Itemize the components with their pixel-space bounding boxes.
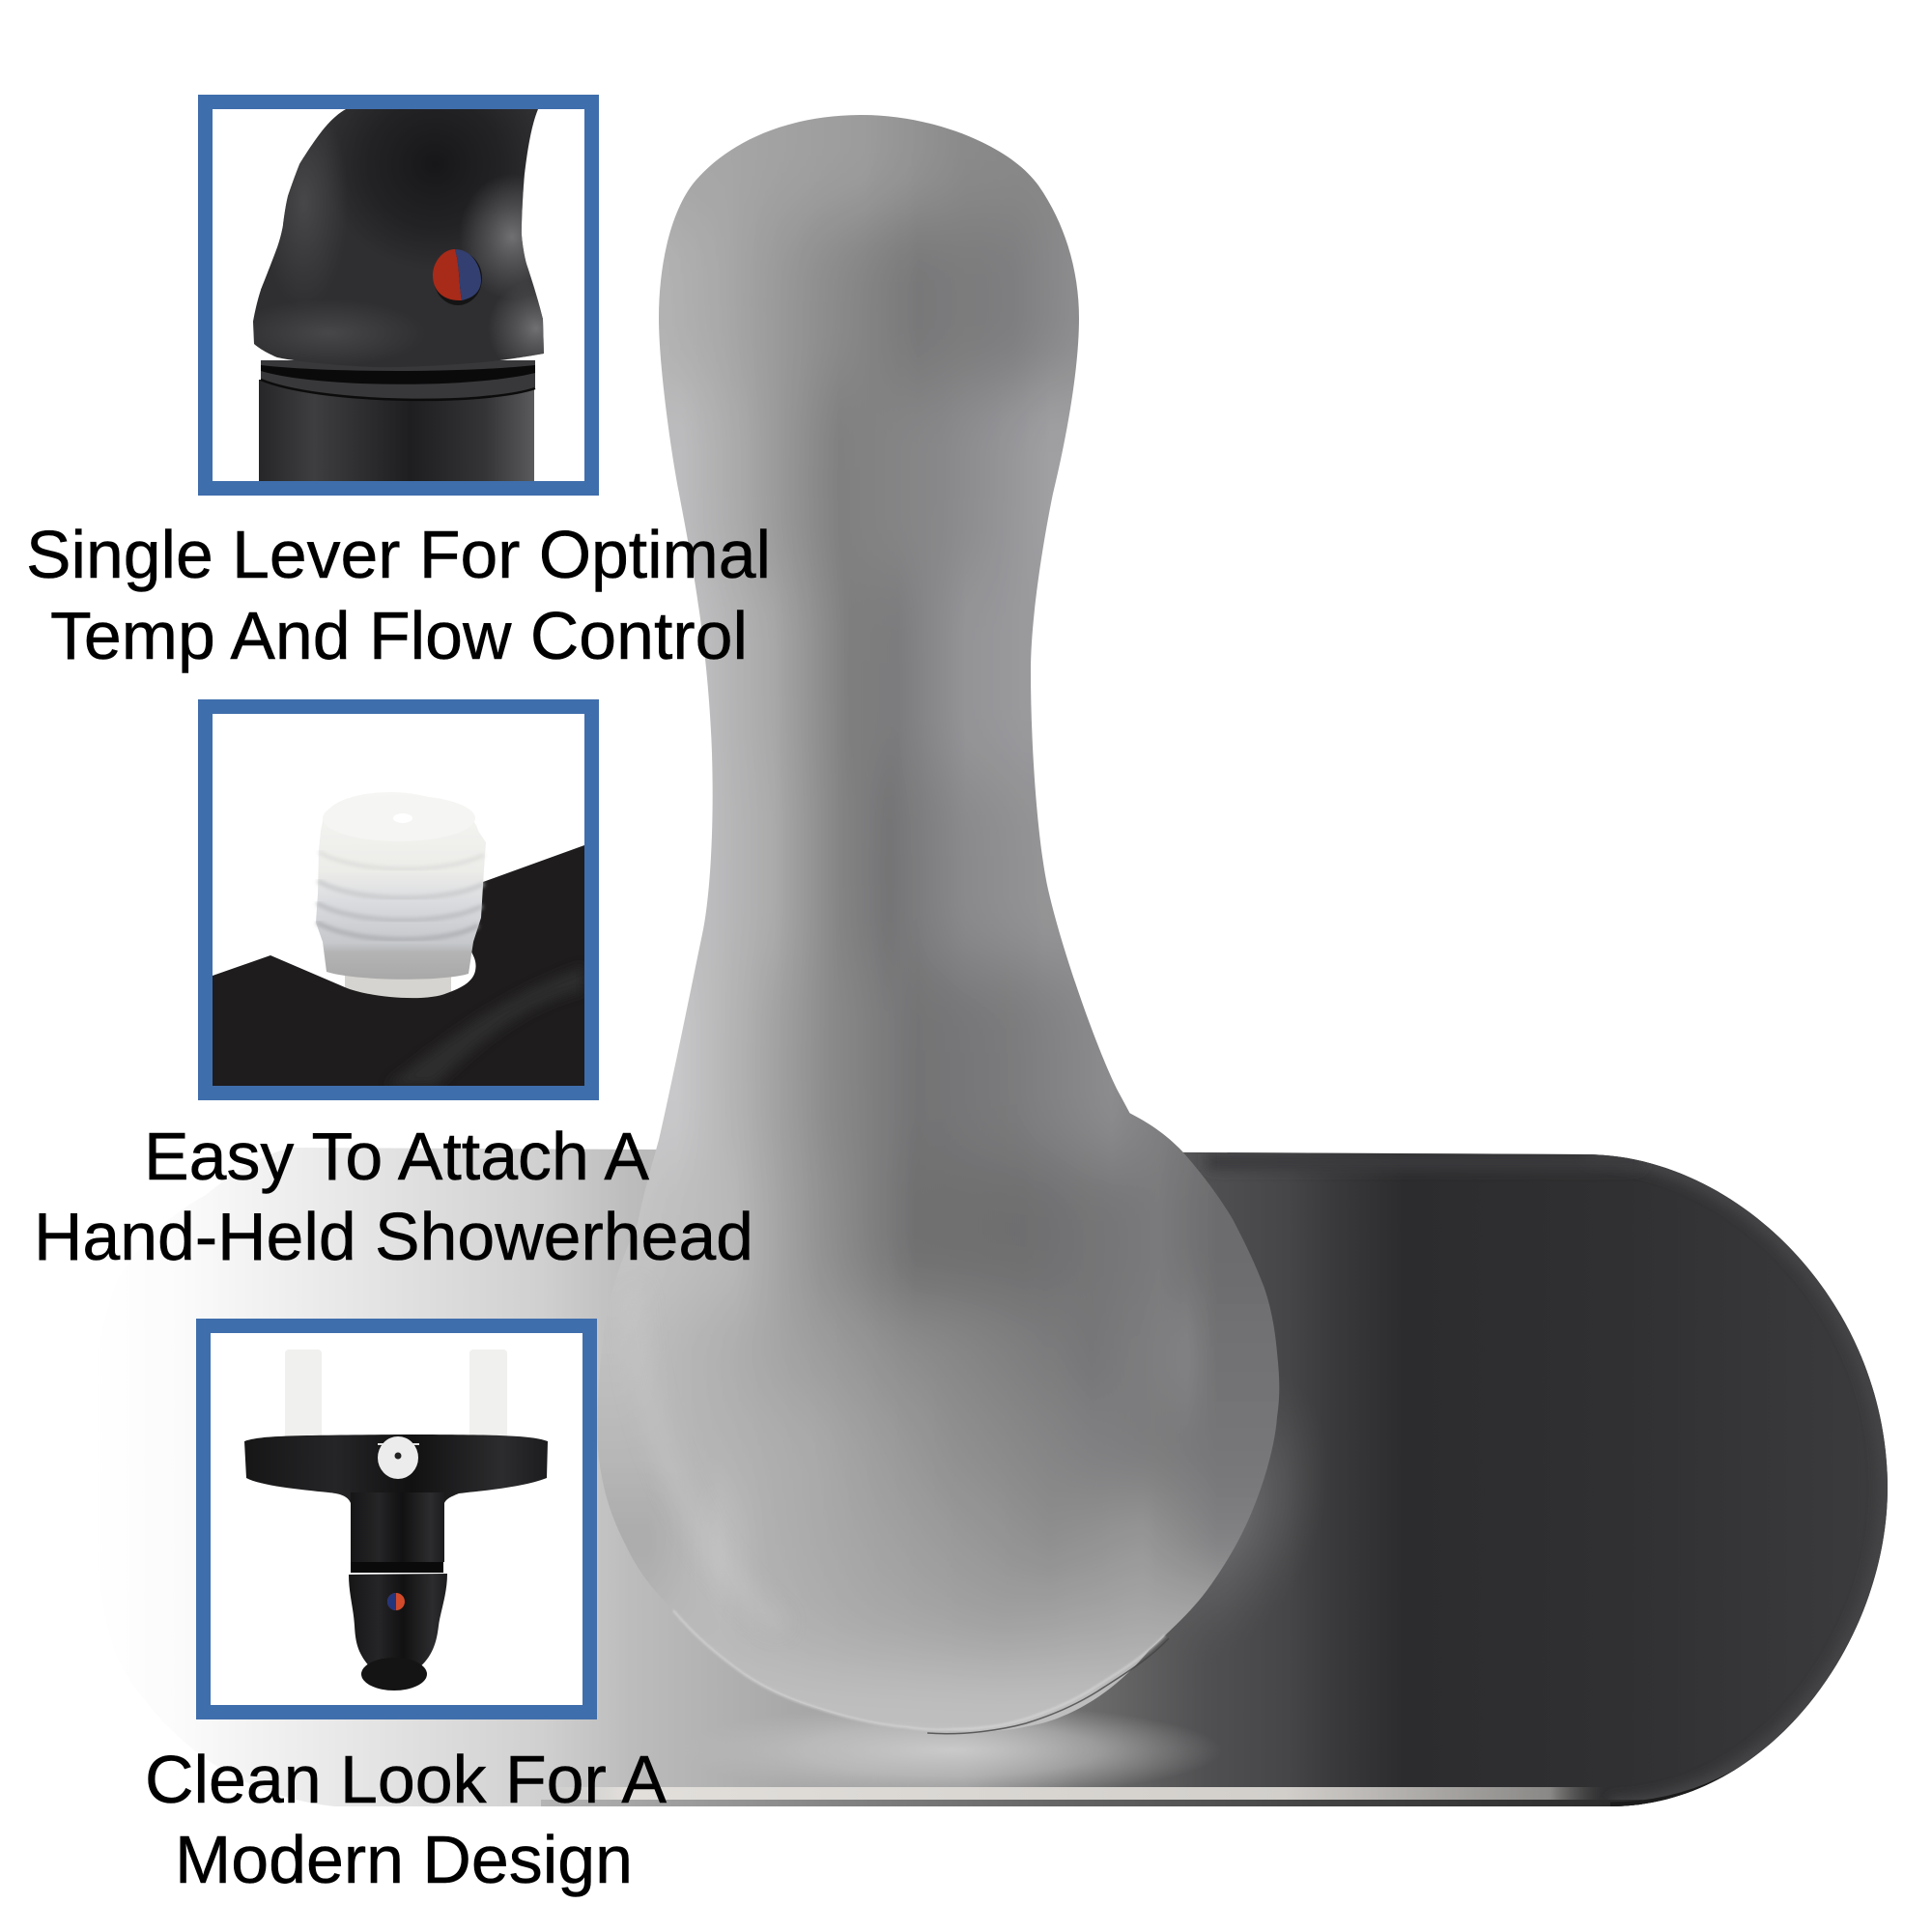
black deck plate: [213, 845, 584, 1086]
indicator dot: [387, 1593, 405, 1610]
base plate edge strip: [541, 1787, 1604, 1800]
caption: attach showerhead: [34, 1119, 753, 1274]
lever handle base: [253, 109, 544, 367]
stem: [351, 1492, 444, 1562]
inset panel: faucet underside view: [203, 1325, 589, 1712]
inset 2 blue frame: [205, 707, 591, 1094]
faucet product photo: [215, 115, 1888, 1806]
egg base edge highlight: [673, 1610, 1165, 1730]
silver stem in hole: [345, 976, 451, 999]
inset 1 background: [213, 109, 584, 481]
faucet base plate: [87, 1145, 1893, 1811]
caption: attach showerhead: Easy To Attach A: [144, 1119, 649, 1194]
inlet port: [378, 1436, 419, 1479]
stem ring: [351, 1562, 443, 1573]
inset panel: hand-held showerhead attachment: [205, 707, 591, 1094]
collar rim light: [1198, 1428, 1299, 1607]
egg base edge shadow: [927, 1638, 1169, 1734]
inset 1 blue frame: [205, 102, 591, 489]
ring collar: [261, 360, 535, 400]
caption: single lever: Single Lever For Optimal: [26, 517, 771, 592]
glow beneath the handle: [755, 1714, 1205, 1787]
underside plate: [244, 1435, 548, 1503]
white threaded posts: [285, 1350, 507, 1438]
lever knob: [361, 1658, 427, 1690]
caption: single lever: [26, 517, 771, 673]
inset panel: single lever close-up: [205, 58, 591, 489]
caption: clean look: Modern Design: [175, 1822, 633, 1897]
caption: clean look: Clean Look For A: [145, 1742, 667, 1817]
lever edge sheen, left: [633, 1294, 778, 1623]
faucet lever handle and collar: [597, 115, 1279, 1731]
caption: clean look: [145, 1742, 667, 1897]
inset 3 blue frame: [203, 1325, 589, 1712]
caption: single lever: Temp And Flow Control: [50, 598, 748, 673]
lower faucet body: [259, 380, 534, 483]
threaded plug: [316, 792, 486, 980]
caption: attach showerhead: Hand-Held Showerhead: [34, 1199, 753, 1274]
temperature indicator dot: [433, 249, 482, 305]
lever head: [349, 1574, 447, 1669]
inset 2 background: [213, 714, 584, 1086]
inset 3 background: [211, 1333, 582, 1705]
